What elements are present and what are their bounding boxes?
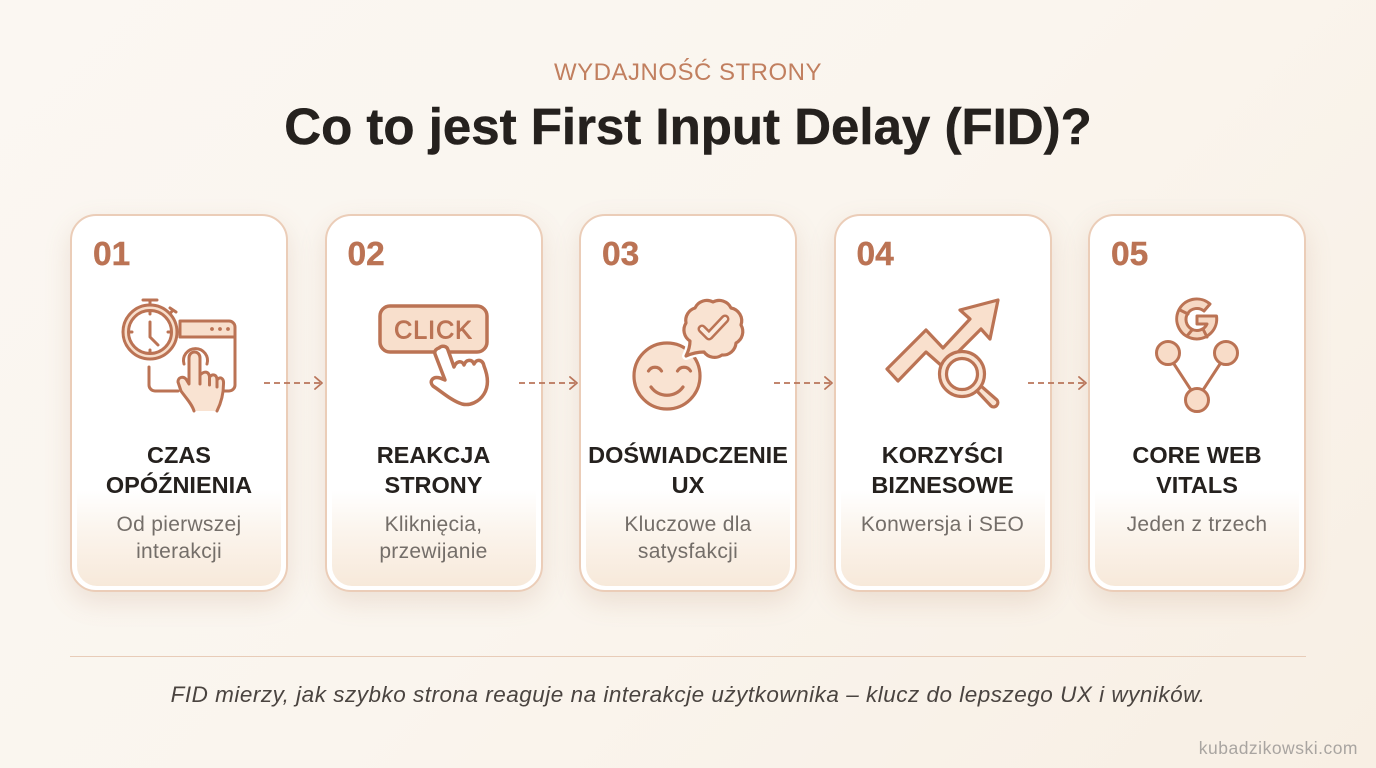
arrow: step 4 to 5 bbox=[1028, 376, 1087, 390]
watermark: kubadzikowski.com bbox=[1199, 738, 1358, 758]
panel: step 2 bbox=[324, 214, 542, 592]
heading: korzyści biznesowe bbox=[871, 442, 1014, 498]
text: step 1 description: Od pierwszej bbox=[116, 513, 241, 536]
icon: stopwatch, browser window and pointing hand bbox=[122, 298, 236, 413]
text: step 3 description: Kluczowe dla bbox=[624, 513, 752, 536]
heading: doświadczenie ux: DOŚWIADCZENIE bbox=[588, 442, 788, 468]
arrow: step 2 to 3 bbox=[519, 376, 578, 390]
text: step 4 description: Konwersja i SEO bbox=[861, 513, 1024, 536]
icon: rising arrow with magnifying glass bbox=[885, 298, 1000, 408]
step number 02: 02 bbox=[348, 236, 385, 273]
panel: step 4 bbox=[834, 214, 1052, 592]
icon: smiling face with check speech bubble bbox=[632, 298, 744, 411]
footer summary: FID mierzy, jak szybko strona reaguje na interakcje użytkownika – klucz do lepszego UX i wyników. bbox=[171, 682, 1205, 707]
heading: reakcja strony bbox=[377, 442, 490, 498]
text: step 3 description bbox=[624, 513, 752, 563]
step number 05: 05 bbox=[1111, 236, 1148, 273]
heading: doświadczenie ux bbox=[588, 442, 788, 498]
step number 04: 04 bbox=[856, 236, 894, 273]
text: step 5 description: Jeden z trzech bbox=[1127, 513, 1267, 536]
heading: core web vitals: CORE WEB bbox=[1132, 442, 1262, 468]
heading: doświadczenie ux: UX bbox=[672, 472, 704, 498]
text: step 1 description: interakcji bbox=[136, 540, 222, 563]
icon: click button and hand cursor: CLICK bbox=[394, 316, 473, 344]
arrow: step 1 to 2 bbox=[264, 376, 323, 390]
panel: step 3 bbox=[579, 214, 797, 592]
step number 01: 01 bbox=[93, 236, 130, 273]
icon: click button and hand cursor bbox=[378, 304, 490, 406]
text: step 2 description: przewijanie bbox=[379, 540, 488, 563]
heading: czas opóźnienia: OPÓŹNIENIA bbox=[106, 472, 252, 498]
text: step 2 description bbox=[379, 513, 488, 563]
eyebrow: WYDAJNOŚĆ STRONY bbox=[554, 59, 822, 86]
heading: czas opóźnienia bbox=[106, 442, 252, 498]
panel: step 1 bbox=[70, 214, 288, 592]
panel: step 5 bbox=[1088, 214, 1306, 592]
heading: korzyści biznesowe: KORZYŚCI bbox=[882, 442, 1003, 468]
heading: korzyści biznesowe: BIZNESOWE bbox=[871, 472, 1014, 498]
text: step 2 description: Kliknięcia, bbox=[385, 513, 482, 536]
heading: reakcja strony: STRONY bbox=[385, 472, 482, 498]
icon: google logo and connected nodes bbox=[1155, 298, 1239, 413]
heading: core web vitals bbox=[1132, 442, 1262, 498]
title: Co to jest First Input Delay (FID)? bbox=[284, 98, 1092, 155]
heading: core web vitals: VITALS bbox=[1156, 472, 1238, 498]
arrow: step 3 to 4 bbox=[774, 376, 833, 390]
heading: reakcja strony: REAKCJA bbox=[377, 442, 490, 468]
heading: czas opóźnienia: CZAS bbox=[147, 442, 211, 468]
step number 03: 03 bbox=[602, 236, 639, 273]
text: step 3 description: satysfakcji bbox=[638, 540, 738, 563]
text: step 1 description bbox=[116, 513, 241, 563]
